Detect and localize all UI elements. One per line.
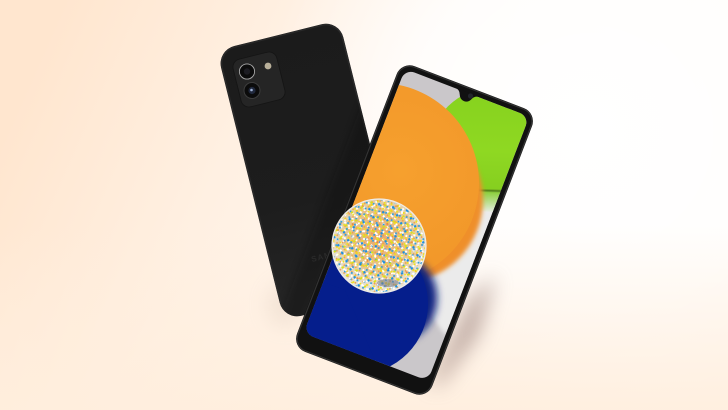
glitter circle [332, 199, 426, 293]
back phone [220, 24, 370, 316]
green circle [446, 96, 526, 212]
front phone [296, 65, 533, 395]
front phone frame [292, 61, 537, 399]
blurred blue circle [416, 258, 444, 344]
brand wordmark: SAMSUNG [310, 244, 359, 264]
main blue circle [306, 257, 428, 366]
blue lower left fill [306, 282, 375, 360]
front camera notch [452, 88, 479, 106]
main orange circle [328, 85, 479, 269]
pale band mid screen [430, 194, 500, 336]
main lens [239, 64, 255, 79]
camera island [231, 50, 287, 109]
back phone edge highlight [218, 21, 405, 319]
back phone body [217, 20, 406, 320]
shadow from front phone on back phone [283, 107, 370, 316]
soft shadows under the phones [267, 275, 495, 385]
flash [265, 63, 271, 69]
screen base [306, 72, 526, 378]
selfie camera [468, 93, 473, 99]
rear orange circle [352, 118, 486, 280]
frame edge highlight [293, 62, 536, 398]
depth lens [244, 82, 260, 98]
screen wallpaper [306, 72, 526, 378]
